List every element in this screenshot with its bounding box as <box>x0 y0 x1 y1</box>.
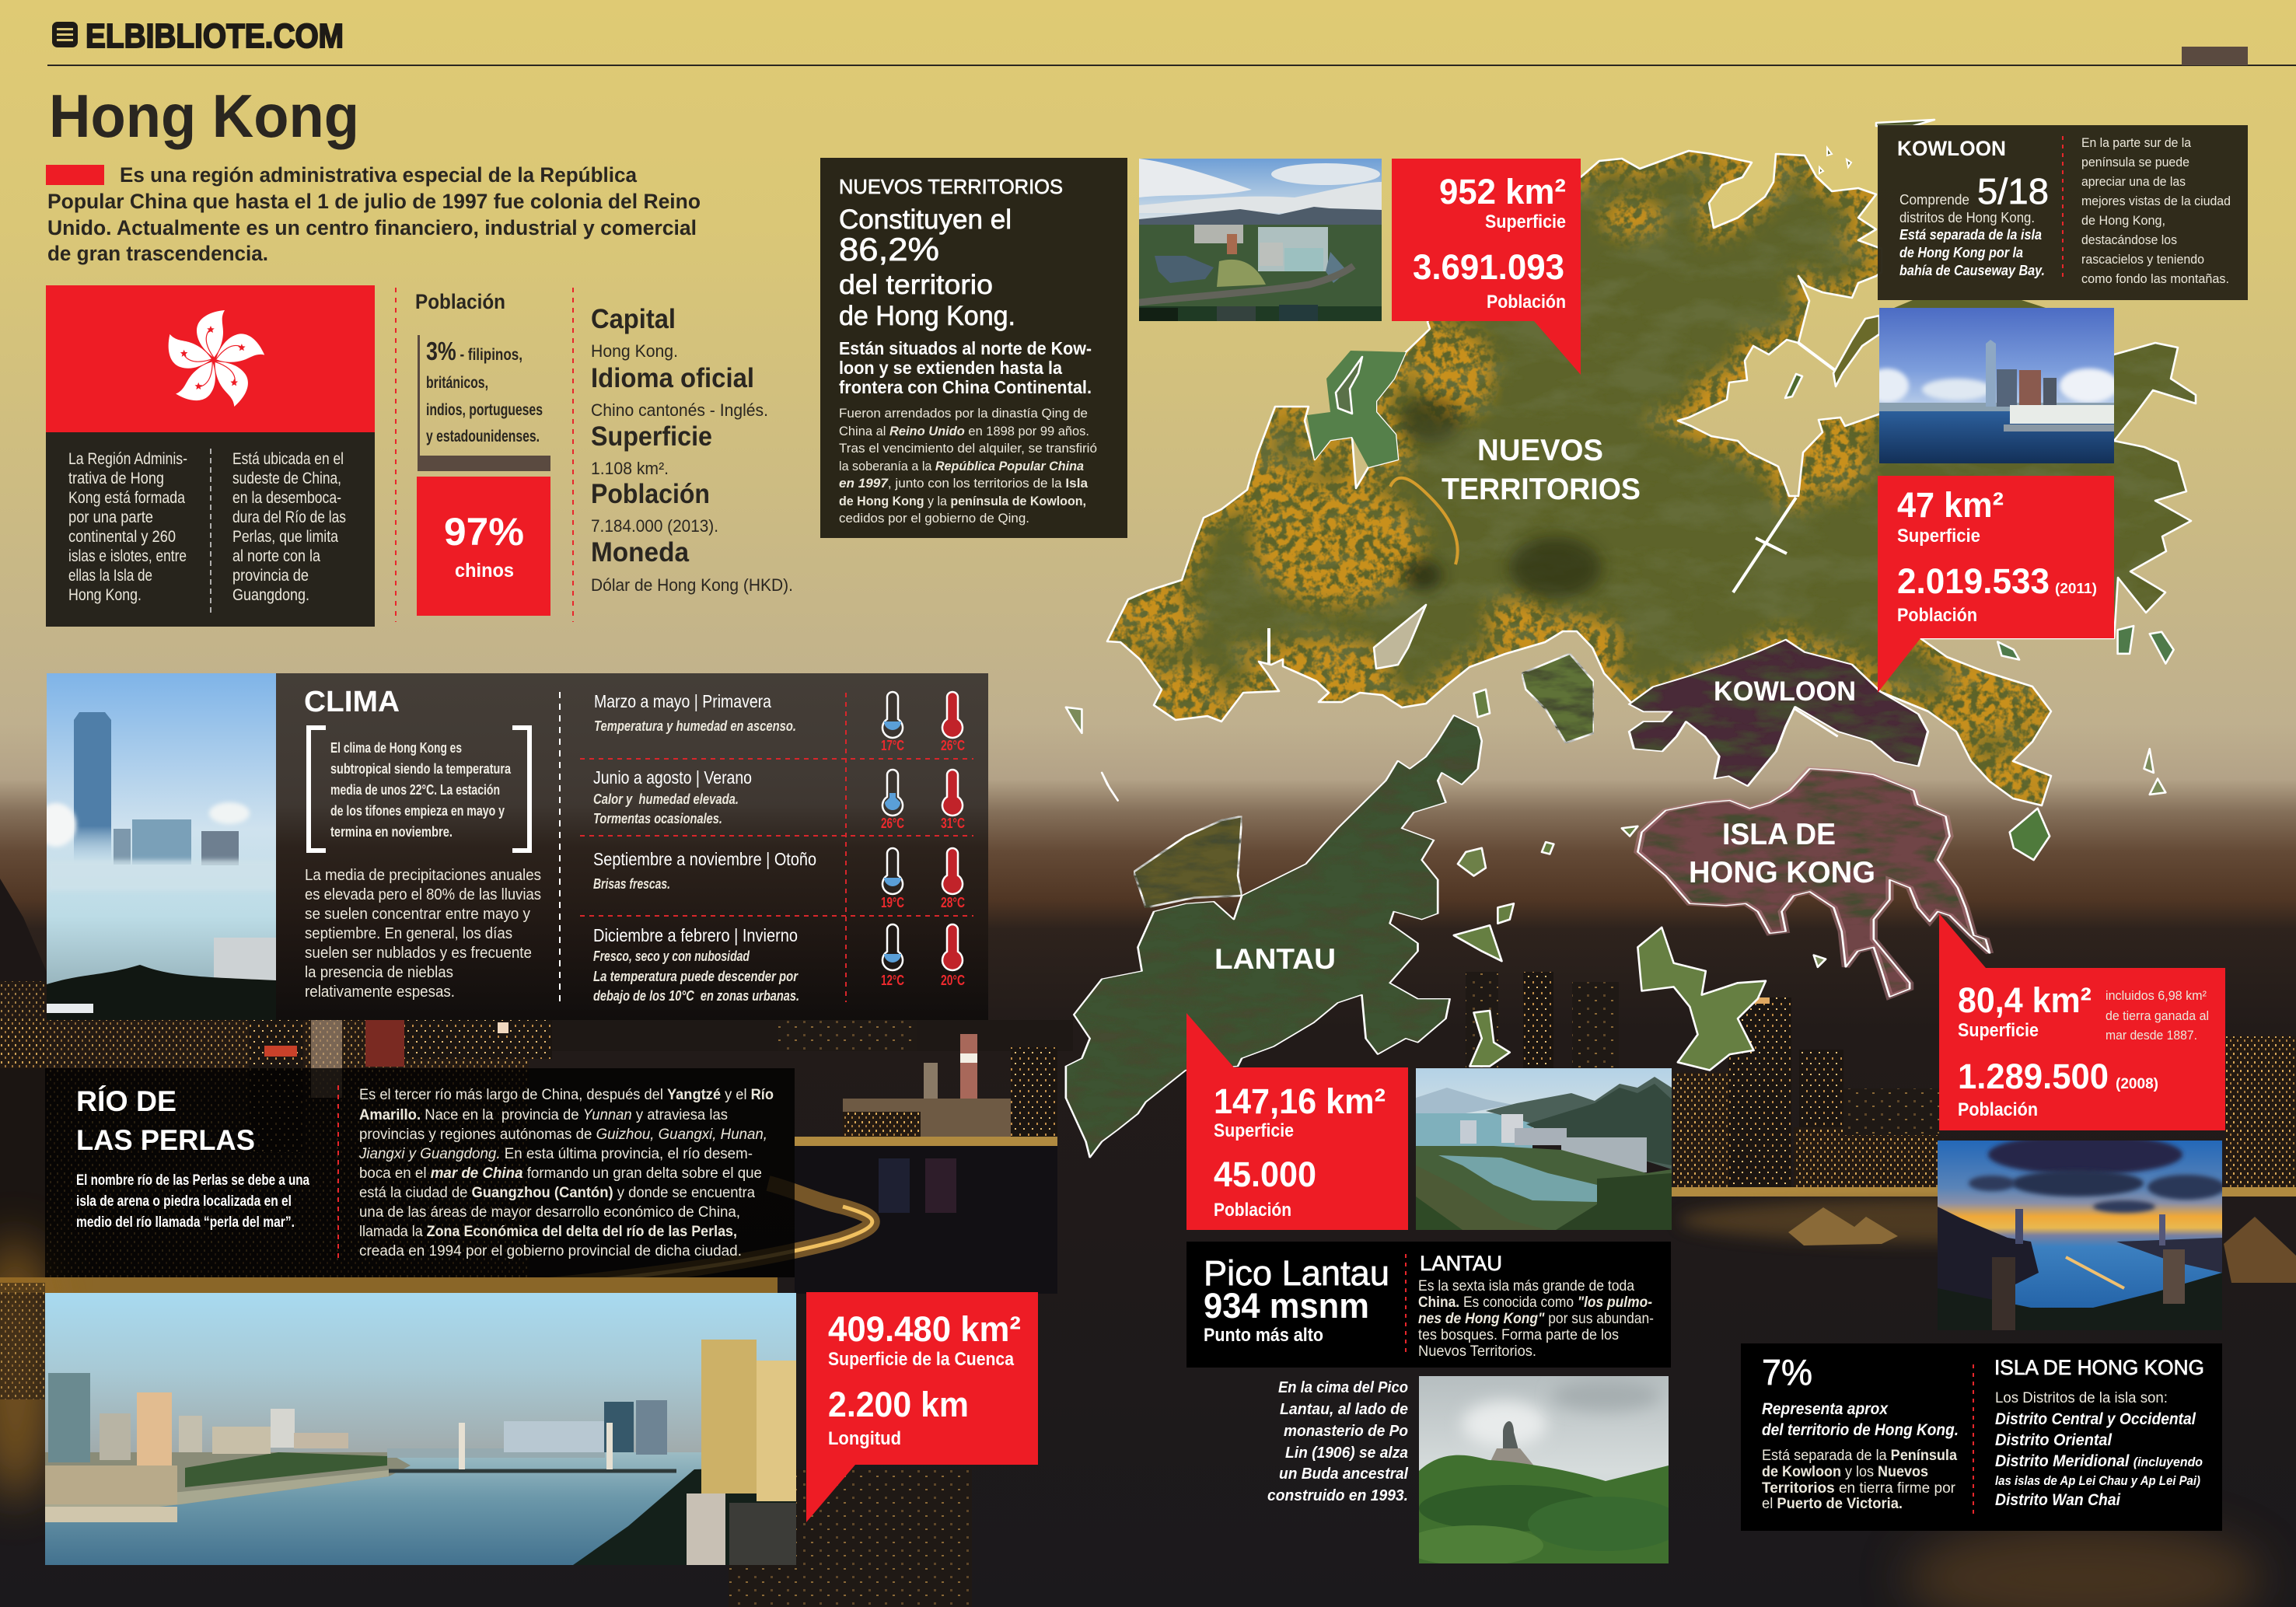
callout: Pearl River figures: 2.200 km <box>828 1385 969 1424</box>
photo: Victoria Harbour at dusk <box>1938 1141 2222 1330</box>
panel: Pico Lantau: China. Es conocida como "los pulmo- <box>1418 1294 1652 1311</box>
callout: Isla de Hong Kong figures: Superficie <box>1958 1020 2039 1041</box>
flag of Hong Kong <box>46 285 375 432</box>
description box: al norte con la <box>232 547 320 565</box>
description box: provincia de <box>232 567 309 585</box>
description box: Hong Kong. <box>68 586 142 604</box>
description box: ellas la Isla de <box>68 567 152 585</box>
panel: Isla de Hong Kong: Está separada de la Península <box>1762 1448 1957 1464</box>
description box: dura del Río de las <box>232 508 346 526</box>
panel: flag and description <box>46 285 375 627</box>
panel: Pico Lantau: Es la sexta isla más grande de toda <box>1418 1278 1634 1294</box>
season: autumn <box>593 849 816 892</box>
description box: Está ubicada en el <box>232 450 344 468</box>
panel: clima: La media de precipitaciones anuales <box>305 867 541 884</box>
caption: Buddha on Pico Lantau: Lin (1906) se alza <box>1285 1445 1408 1462</box>
panel: Río de las Perlas: Es el tercer río más largo de China, después del Yangtzé y el Río <box>359 1087 774 1103</box>
callout: Isla de Hong Kong figures: incluidos 6,98 km² <box>2106 988 2207 1003</box>
season: summer: Tormentas ocasionales. <box>593 811 722 826</box>
panel: Nuevos Territorios: loon y se extienden hasta la <box>839 358 1062 378</box>
callout: Kowloon figures: (2011) <box>2055 581 2097 596</box>
panel: Río de las Perlas: LAS PERLAS <box>76 1124 255 1156</box>
description box: Guangdong. <box>232 586 309 604</box>
intro text with red marker <box>46 163 701 265</box>
panel: Nuevos Territorios: de Hong Kong y la península de Kowloon, <box>839 494 1086 508</box>
panel: key facts: 7.184.000 (2013). <box>591 516 718 536</box>
panel: Pico Lantau: LANTAU <box>1420 1252 1502 1275</box>
callout: Isla de Hong Kong figures: Población <box>1958 1099 2038 1120</box>
photo: Nuevos Territorios new town <box>1139 159 1382 321</box>
header: corner tab <box>2182 47 2248 65</box>
callout: Kowloon figures: Superficie <box>1897 526 1980 547</box>
callout: Kowloon figures: Población <box>1897 605 1977 626</box>
panel: key facts: Superficie <box>591 421 712 452</box>
callout: Isla de Hong Kong figures <box>1939 914 2225 1130</box>
majority box <box>417 477 550 616</box>
season: spring: Marzo a mayo | Primavera <box>594 691 771 711</box>
panel: Nuevos Territorios: Constituyen el <box>839 204 1012 235</box>
panel: Isla de Hong Kong: 7% <box>1762 1352 1812 1392</box>
panel: Pico Lantau <box>1186 1242 1671 1368</box>
callout: Nuevos Territorios figures: Superficie <box>1485 211 1566 232</box>
panel: population: y estadounidenses. <box>426 428 540 445</box>
panel: key facts: Idioma oficial <box>591 363 754 393</box>
map: Nuevos Territorios <box>1107 120 2196 805</box>
season: winter: Diciembre a febrero | Invierno <box>593 925 798 945</box>
panel: Río de las Perlas: creada en 1994 por el gobierno provincial de dicha ciudad. <box>359 1243 742 1259</box>
panel: Isla de Hong Kong: ISLA DE HONG KONG <box>1994 1356 2204 1379</box>
panel: key facts: Población <box>591 479 710 509</box>
panel: Nuevos Territorios: cedidos por el gobierno de Qing. <box>839 511 1029 526</box>
panel: Kowloon: En la parte sur de la <box>2081 135 2191 150</box>
description box: Kong está formada <box>68 489 185 507</box>
caption: Buddha on Pico Lantau: Lantau, al lado de <box>1280 1401 1408 1418</box>
panel: clima: subtropical siendo la temperatura <box>330 761 512 777</box>
panel: Pico Lantau: tes bosques. Forma parte de los <box>1418 1327 1619 1343</box>
panel: population: británicos, <box>426 374 488 392</box>
callout: Isla de Hong Kong figures: mar desde 1887. <box>2106 1028 2197 1043</box>
description box: continental y 260 <box>68 528 176 546</box>
panel: Kowloon: de Hong Kong por la <box>1899 245 2023 260</box>
thermometers and temperatures: 19°C <box>881 895 904 910</box>
thermometers and temperatures: 20°C <box>941 973 965 988</box>
caption: Buddha on Pico Lantau: monasterio de Po <box>1284 1423 1408 1440</box>
header: logo: ELBIBLIOTE.COM <box>86 17 344 55</box>
callout: Isla de Hong Kong figures: 80,4 km² <box>1958 980 2092 1020</box>
panel: clima: es elevada pero el 80% de las lluvias <box>305 886 541 903</box>
callout: Lantau figures: 45.000 <box>1214 1155 1316 1194</box>
panel: Isla de Hong Kong: el Puerto de Victoria. <box>1762 1496 1903 1512</box>
panel: Kowloon: como fondo las montañas. <box>2081 271 2229 286</box>
panel: Nuevos Territorios: Están situados al norte de Kow- <box>839 338 1092 358</box>
panel: clima <box>276 673 988 1020</box>
panel: Río de las Perlas: provincias y regiones autónomas de Guizhou, Guangxi, Hunan, <box>359 1127 767 1143</box>
panel: clima: termina en noviembre. <box>330 824 453 840</box>
panel: Isla de Hong Kong: del territorio de Hong Kong. <box>1762 1421 1959 1439</box>
callout: Kowloon figures: 2.019.533 <box>1897 561 2050 601</box>
panel: Río de las Perlas: El nombre río de las Perlas se debe a una <box>76 1172 309 1189</box>
panel: key facts: Chino cantonés - Inglés. <box>591 400 768 420</box>
thermometers and temperatures: 17°C <box>881 738 904 753</box>
callout: Nuevos Territorios figures: 3.691.093 <box>1413 247 1564 287</box>
callout: Lantau figures: Superficie <box>1214 1120 1294 1141</box>
photo: Lantau coast <box>1416 1068 1672 1230</box>
description box: La Región Adminis- <box>68 450 187 468</box>
panel: Río de las Perlas: isla de arena o piedra localizada en el <box>76 1193 292 1210</box>
panel: Río de las Perlas: boca en el mar de China formando un gran delta sobre el que <box>359 1165 762 1182</box>
map: Isla de Hong Kong <box>1637 769 1990 997</box>
panel: clima photo <box>47 673 276 1020</box>
callout: Pearl River figures: Superficie de la Cuenca <box>828 1349 1015 1370</box>
panel: clima: septiembre. En general, los días <box>305 925 512 942</box>
panel: Nuevos Territorios: 86,2% <box>839 231 939 267</box>
thermometers and temperatures: 28°C <box>941 895 965 910</box>
minority bar <box>418 456 550 471</box>
map: Lantau and outlying islands <box>1066 626 2174 1158</box>
panel: Kowloon: mejores vistas de la ciudad <box>2081 194 2231 208</box>
panel: Pico Lantau: nes de Hong Kong" por sus abundan- <box>1418 1311 1654 1327</box>
panel: clima: CLIMA <box>304 686 400 718</box>
panel: Pico Lantau: Pico Lantau <box>1204 1253 1389 1293</box>
panel: Nuevos Territorios <box>820 158 1127 538</box>
thermometers and temperatures: 31°C <box>941 816 965 831</box>
intro text with red marker: Unido. Actualmente es un centro financiero, industrial y comercial <box>47 216 697 239</box>
panel: key facts: Moneda <box>591 537 689 568</box>
panel: Pico Lantau: Nuevos Territorios. <box>1418 1343 1536 1360</box>
panel: Kowloon: Está separada de la isla <box>1899 227 2042 243</box>
season: autumn: Brisas frescas. <box>593 876 670 892</box>
panel: Kowloon: península se puede <box>2081 155 2189 169</box>
callout: Pearl River figures <box>806 1292 1038 1522</box>
panel: Kowloon: 5/18 <box>1977 171 2049 211</box>
description box: sudeste de China, <box>232 470 341 487</box>
panel: clima: relativamente espesas. <box>305 983 455 1001</box>
callout: Isla de Hong Kong figures: (2008) <box>2116 1076 2158 1092</box>
caption: Buddha on Pico Lantau: construido en 1993. <box>1267 1487 1408 1504</box>
panel: clima: de los tifones empieza en mayo y <box>330 803 505 819</box>
callout: Isla de Hong Kong figures: de tierra ganada al <box>2106 1008 2209 1023</box>
thermometers and temperatures: 26°C <box>881 816 904 831</box>
panel: Kowloon: distritos de Hong Kong. <box>1899 210 2035 225</box>
panel: population: indios, portugueses <box>426 401 543 419</box>
panel: population: 97% <box>444 510 524 554</box>
photo: Kowloon waterfront <box>1879 308 2114 463</box>
description box <box>46 432 375 627</box>
thermometers and temperatures <box>881 692 965 988</box>
description box: en la desemboca- <box>232 489 341 507</box>
panel: Kowloon: Comprende <box>1899 192 1969 208</box>
panel: Río de las Perlas: llamada la Zona Económica del delta del río de las Perlas, <box>359 1224 737 1240</box>
panel: Kowloon: destacándose los <box>2081 232 2177 247</box>
callout: Lantau figures <box>1186 1013 1408 1230</box>
panel: clima: suelen ser nublados y es frecuente <box>305 945 532 962</box>
panel: Isla de Hong Kong: Distrito Central y Occidental <box>1995 1410 2196 1428</box>
season: summer: Junio a agosto | Verano <box>593 767 752 788</box>
panel: Isla de Hong Kong: Los Distritos de la isla son: <box>1995 1390 2168 1406</box>
description box: islas e islotes, entre <box>68 547 187 565</box>
panel: Nuevos Territorios: en 1997, junto con los territorios de la Isla <box>839 476 1089 491</box>
callout: Lantau figures: 147,16 km² <box>1214 1081 1386 1121</box>
map of Hong Kong <box>1066 120 2196 1158</box>
panel: Nuevos Territorios: del territorio <box>839 270 993 300</box>
panel: clima: se suelen concentrar entre mayo y <box>305 906 530 923</box>
thermometers and temperatures: 12°C <box>881 973 904 988</box>
panel: Nuevos Territorios: la soberanía a la República Popular China <box>839 459 1084 473</box>
callout: Nuevos Territorios figures: Población <box>1487 292 1566 313</box>
description box: por una parte <box>68 508 153 526</box>
quote brackets <box>309 728 529 851</box>
panel: Río de las Perlas: Amarillo. Nace en la provincia de Yunnan y atraviesa las <box>359 1107 728 1123</box>
intro text with red marker: Popular China que hasta el 1 de julio de 1997 fue colonia del Reino <box>47 190 701 213</box>
panel: key facts: Dólar de Hong Kong (HKD). <box>591 575 793 595</box>
map label: Nuevos Territorios: NUEVOS <box>1477 434 1603 467</box>
panel: population <box>415 290 550 616</box>
panel: Isla de Hong Kong: Representa aprox <box>1762 1400 1889 1418</box>
panel: key facts: Capital <box>591 304 676 334</box>
callout: Pearl River figures: 409.480 km² <box>828 1309 1021 1349</box>
photo: Tian Tan Buddha <box>1419 1376 1669 1563</box>
panel: key facts: 1.108 km². <box>591 459 669 478</box>
description box: Perlas, que limita <box>232 528 338 546</box>
panel: Isla de Hong Kong <box>1741 1343 2222 1531</box>
panel: Río de las Perlas: RÍO DE <box>76 1085 176 1117</box>
background: night city skyline <box>0 879 2296 1607</box>
panel: Pico Lantau: Punto más alto <box>1204 1325 1323 1346</box>
panel: Nuevos Territorios: China al Reino Unido en 1898 por 99 años. <box>839 424 1089 438</box>
panel: Pico Lantau: 934 msnm <box>1204 1286 1369 1326</box>
caption: Buddha on Pico Lantau: un Buda ancestral <box>1279 1466 1408 1483</box>
panel: population: 3% - filipinos, <box>426 337 522 365</box>
panel: Kowloon: rascacielos y teniendo <box>2081 252 2204 267</box>
map label: Isla de Hong Kong: HONG KONG <box>1689 856 1875 889</box>
season: winter: debajo de los 10°C en zonas urbanas. <box>593 988 799 1004</box>
panel: Kowloon: KOWLOON <box>1897 137 2006 160</box>
title: Hong Kong <box>49 82 359 150</box>
photo: Pearl River <box>45 1293 796 1565</box>
callout: Nuevos Territorios figures <box>1392 159 1581 375</box>
description box: trativa de Hong <box>68 470 164 487</box>
panel: Nuevos Territorios: frontera con China Continental. <box>839 377 1092 397</box>
panel: Kowloon: bahía de Causeway Bay. <box>1899 263 2045 278</box>
panel: Nuevos Territorios: Tras el vencimiento del alquiler, se transfirió <box>839 441 1097 456</box>
map label: Nuevos Territorios: TERRITORIOS <box>1442 473 1641 506</box>
caption: Buddha on Pico Lantau: En la cima del Pico <box>1278 1379 1408 1396</box>
panel: Nuevos Territorios: Fueron arrendados por la dinastía Qing de <box>839 406 1088 421</box>
panel: Isla de Hong Kong: Distrito Oriental <box>1995 1431 2113 1449</box>
panel: Nuevos Territorios: NUEVOS TERRITORIOS <box>839 175 1063 198</box>
callout: Isla de Hong Kong figures: 1.289.500 <box>1958 1057 2109 1096</box>
panel: clima: media de unos 22°C. La estación <box>330 782 500 798</box>
season: spring <box>594 691 796 734</box>
callout: Kowloon figures <box>1878 476 2114 693</box>
panel: Isla de Hong Kong: de Kowloon y los Nuevos <box>1762 1464 1928 1480</box>
panel: population: Población <box>415 290 505 313</box>
panel: Río de las Perlas: medio del río llamada “perla del mar”. <box>76 1214 295 1231</box>
panel: Nuevos Territorios: de Hong Kong. <box>839 301 1015 331</box>
map label: Kowloon: KOWLOON <box>1714 676 1856 707</box>
intro text with red marker: Es una región administrativa especial de la República <box>120 163 638 187</box>
panel: Río de las Perlas: está la ciudad de Guangzhou (Cantón) y donde se encuentra <box>359 1185 755 1201</box>
season: summer: Calor y humedad elevada. <box>593 791 739 807</box>
panel: Isla de Hong Kong: las islas de Ap Lei Chau y Ap Lei Pai) <box>1995 1473 2200 1488</box>
panel: Isla de Hong Kong: Territorios en tierra firme por <box>1762 1480 1956 1497</box>
panel: key facts <box>591 304 793 595</box>
map: Kowloon <box>1629 640 1928 786</box>
season: winter: Fresco, seco y con nubosidad <box>593 948 750 964</box>
map label: Isla de Hong Kong: ISLA DE <box>1722 818 1836 851</box>
season: winter <box>593 925 799 1004</box>
map label: Lantau: LANTAU <box>1214 943 1336 975</box>
panel: clima: El clima de Hong Kong es <box>330 740 462 756</box>
season: spring: Temperatura y humedad en ascenso. <box>594 718 796 734</box>
Mai Po wetlands <box>1307 351 1406 467</box>
season: autumn: Septiembre a noviembre | Otoño <box>593 849 816 869</box>
caption: Buddha on Pico Lantau <box>1267 1379 1408 1504</box>
map label: Isla de Hong Kong <box>1689 818 1875 889</box>
panel: Isla de Hong Kong: Distrito Meridional (incluyendo <box>1995 1452 2203 1470</box>
panel: Kowloon <box>1878 125 2248 300</box>
callout: Nuevos Territorios figures: 952 km² <box>1439 172 1566 211</box>
thermometers and temperatures: 26°C <box>941 738 965 753</box>
panel: Kowloon: de Hong Kong, <box>2081 213 2165 228</box>
panel: Isla de Hong Kong: Distrito Wan Chai <box>1995 1491 2121 1509</box>
callout: Pearl River figures: Longitud <box>828 1428 901 1449</box>
season: summer <box>593 767 752 826</box>
callout: Lantau figures: Población <box>1214 1200 1291 1221</box>
callout: Kowloon figures: 47 km² <box>1897 485 2004 525</box>
panel: Río de las Perlas <box>45 1068 795 1277</box>
panel: clima: la presencia de nieblas <box>305 964 453 981</box>
map label: Nuevos Territorios <box>1442 434 1641 506</box>
panel: Río de las Perlas: Jiangxi y Guangdong. En esta última provincia, el río desem- <box>358 1146 753 1162</box>
panel: Río de las Perlas: una de las áreas de mayor desarrollo económico de China, <box>359 1204 740 1221</box>
panel: key facts: Hong Kong. <box>591 341 678 361</box>
intro text with red marker: de gran trascendencia. <box>47 242 268 265</box>
season: winter: La temperatura puede descender por <box>593 969 799 984</box>
panel: Kowloon: apreciar una de las <box>2081 174 2186 189</box>
panel: population: chinos <box>455 560 514 582</box>
